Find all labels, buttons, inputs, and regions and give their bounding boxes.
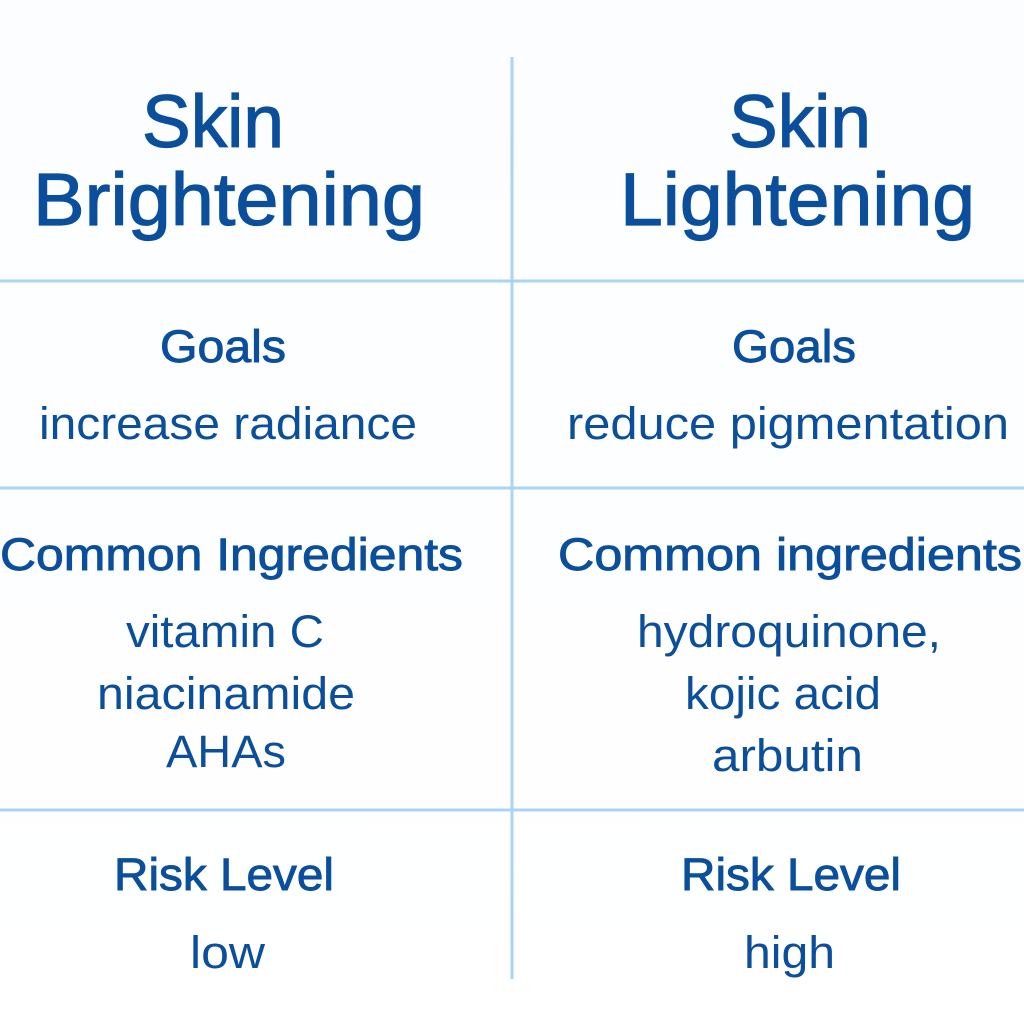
brightening goals: increase radiance bbox=[39, 398, 417, 449]
brightening ingredients: Common Ingredients bbox=[0, 529, 463, 580]
lightening ingredients bbox=[558, 529, 1022, 781]
brightening ingredients: niacinamide bbox=[97, 668, 355, 719]
lightening ingredients: kojic acid bbox=[685, 668, 881, 719]
brightening goals bbox=[39, 321, 417, 449]
lightening risk level: Risk Level bbox=[681, 849, 901, 900]
brightening goals: Goals bbox=[160, 321, 286, 372]
lightening goals: reduce pigmentation bbox=[567, 398, 1009, 449]
brightening ingredients: AHAs bbox=[166, 726, 286, 777]
lightening ingredients: Common ingredients bbox=[558, 529, 1022, 580]
lightening ingredients: hydroquinone, bbox=[637, 606, 941, 657]
brightening risk level: low bbox=[190, 927, 266, 978]
brightening ingredients bbox=[0, 529, 463, 777]
lightening ingredients: arbutin bbox=[712, 730, 863, 781]
title: skin lightening: Skin bbox=[729, 80, 871, 163]
brightening risk level bbox=[114, 849, 334, 978]
title: skin brightening: Brightening bbox=[33, 158, 425, 241]
title: skin lightening bbox=[620, 80, 975, 241]
title: skin lightening: Lightening bbox=[620, 158, 975, 241]
brightening ingredients: vitamin C bbox=[126, 606, 324, 657]
lightening goals bbox=[567, 321, 1009, 449]
title: skin brightening bbox=[33, 80, 425, 241]
title: skin brightening: Skin bbox=[142, 80, 284, 163]
lightening risk level: high bbox=[744, 927, 835, 978]
lightening risk level bbox=[681, 849, 901, 978]
brightening risk level: Risk Level bbox=[114, 849, 334, 900]
lightening goals: Goals bbox=[732, 321, 856, 372]
